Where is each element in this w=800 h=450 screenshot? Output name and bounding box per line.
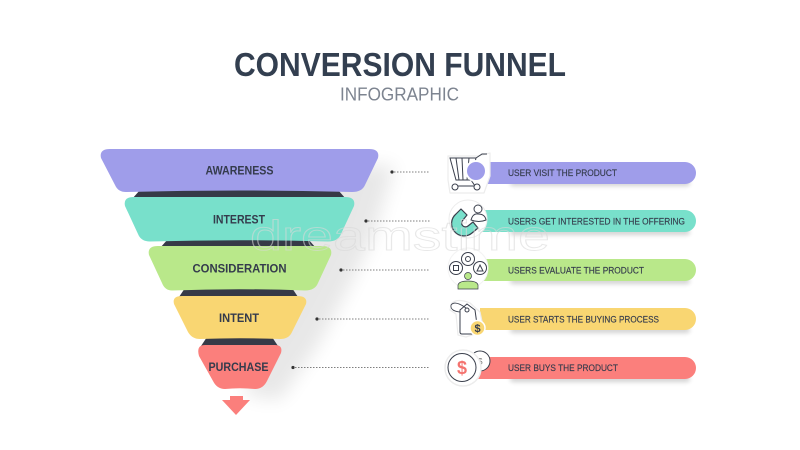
description bar: intent [480,308,696,330]
funnel shadow [245,165,395,400]
title: CONVERSION FUNNEL [234,46,566,83]
funnel level: interest: INTEREST [213,214,265,226]
description bar: consideration [480,259,696,281]
dark connector bands [132,190,346,346]
icon: evaluating user [448,248,488,289]
icon: coins [445,350,490,386]
watermark: dreamstime [250,212,550,259]
description bar: interest: USERS GET INTERESTED IN THE OFFERING [508,216,685,226]
description bar: interest [480,210,696,232]
arrow down [222,396,250,415]
funnel level: awareness [101,149,378,192]
bar shadows [510,180,690,382]
funnel level: awareness: AWARENESS [206,166,274,178]
funnel level: intent [174,296,306,339]
description bar: awareness [480,162,696,184]
funnel level: consideration: CONSIDERATION [192,264,286,276]
funnel level: intent: INTENT [219,313,259,325]
description bar: consideration: USERS EVALUATE THE PRODUCT [508,266,644,276]
description bar: purchase: USER BUYS THE PRODUCT [508,363,618,373]
funnel level: consideration [149,246,331,290]
icon: coins: $ [457,358,467,378]
dotted leaders [291,170,430,369]
subtitle: INFOGRAPHIC [340,84,459,104]
funnel [101,149,378,415]
description bar: awareness: USER VISIT THE PRODUCT [508,168,617,178]
icon: price tag [450,300,485,337]
icon: coins: $ [477,356,483,366]
description bar: purchase [470,357,696,379]
icon: magnet with user [449,200,487,238]
funnel level: interest [125,197,354,242]
description bar: intent: USER STARTS THE BUYING PROCESS [508,314,659,324]
icon: shopping cart [448,153,490,193]
funnel level: purchase [198,345,281,389]
funnel level: purchase: PURCHASE [208,362,269,374]
icon: price tag: $ [474,323,481,335]
